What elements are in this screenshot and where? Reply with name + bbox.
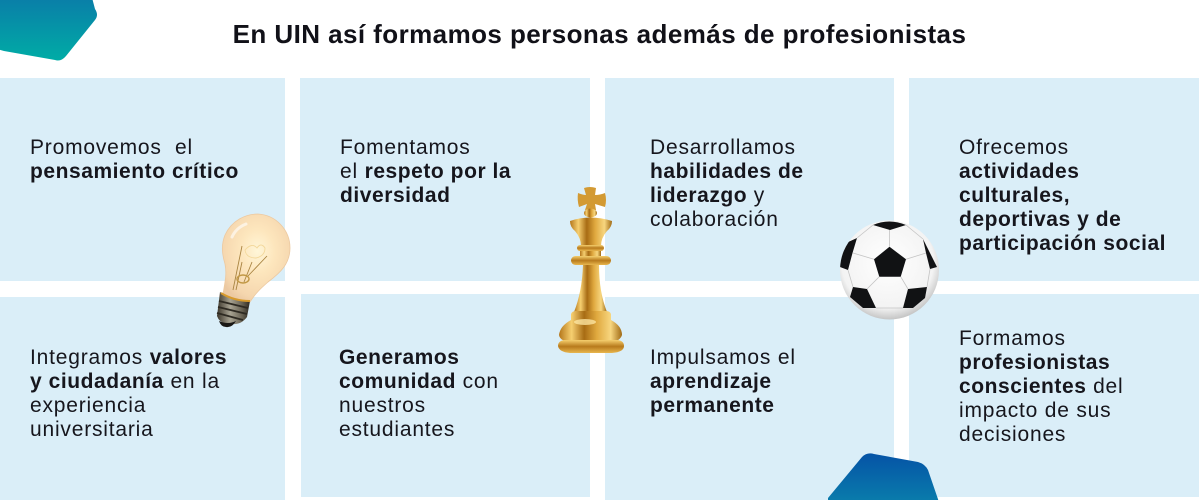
text: aprendizaje permanente: Impulsamos el bbox=[650, 346, 796, 369]
text: respeto por la diversidad: diversidad bbox=[340, 184, 451, 207]
text: pensamiento crítico bbox=[30, 136, 239, 183]
text: actividades culturales bbox=[959, 136, 1166, 255]
text: respeto por la diversidad: Fomentamos bbox=[340, 136, 471, 159]
text: aprendizaje permanente: permanente bbox=[650, 394, 775, 417]
text: valores y ciudadanía: experiencia bbox=[30, 394, 146, 417]
panel: pensamiento crítico bbox=[0, 78, 285, 281]
text: profesionistas conscientes: decisiones bbox=[959, 423, 1066, 446]
text: respeto por la diversidad: el respeto por la bbox=[340, 160, 511, 183]
panel: actividades culturales bbox=[909, 78, 1199, 281]
text: liderazgo y colaboración: liderazgo y bbox=[650, 184, 765, 207]
text: generamos comunidad: nuestros bbox=[339, 394, 426, 417]
text: pensamiento crítico: pensamiento crítico bbox=[30, 160, 239, 183]
text: profesionistas conscientes bbox=[959, 327, 1124, 446]
decorative blue hexagon, bottom right bbox=[828, 453, 938, 500]
icon: golden chess king bbox=[558, 187, 624, 353]
text: generamos comunidad: comunidad con bbox=[339, 370, 499, 393]
text: generamos comunidad: Generamos bbox=[339, 346, 460, 369]
text: aprendizaje permanente: aprendizaje bbox=[650, 370, 772, 393]
text: valores y ciudadanía: universitaria bbox=[30, 418, 154, 441]
text: valores y ciudadanía: y ciudadanía en la bbox=[30, 370, 220, 393]
panel: liderazgo y colaboración bbox=[605, 78, 894, 281]
text: actividades culturales: culturales, bbox=[959, 184, 1070, 207]
text: profesionistas conscientes: impacto de sus bbox=[959, 399, 1111, 422]
title: En UIN así formamos personas además de profesionistas bbox=[233, 19, 966, 49]
panel: aprendizaje permanente bbox=[605, 297, 894, 500]
text: profesionistas conscientes: profesionistas bbox=[959, 351, 1110, 374]
panel: generamos comunidad bbox=[301, 294, 590, 497]
text: generamos comunidad bbox=[339, 346, 499, 441]
text: liderazgo y colaboración: Desarrollamos bbox=[650, 136, 796, 159]
panel: respeto por la diversidad bbox=[300, 78, 590, 281]
text: valores y ciudadanía bbox=[30, 346, 227, 441]
text: liderazgo y colaboración: colaboración bbox=[650, 208, 779, 231]
icon: soccer ball bbox=[840, 220, 939, 320]
icon: light bulb bbox=[216, 214, 290, 328]
panel: profesionistas conscientes bbox=[909, 294, 1199, 497]
text: actividades culturales: actividades bbox=[959, 160, 1079, 183]
text: valores y ciudadanía: Integramos valores bbox=[30, 346, 227, 369]
text: actividades culturales: Ofrecemos bbox=[959, 136, 1069, 159]
text: liderazgo y colaboración: habilidades de bbox=[650, 160, 804, 183]
text: aprendizaje permanente bbox=[650, 346, 796, 417]
text: pensamiento crítico: Promovemos el bbox=[30, 136, 193, 159]
text: liderazgo y colaboración bbox=[650, 136, 804, 231]
text: generamos comunidad: estudiantes bbox=[339, 418, 455, 441]
text: actividades culturales: deportivas y de bbox=[959, 208, 1121, 231]
text: respeto por la diversidad bbox=[340, 136, 511, 207]
panel: valores y ciudadanía bbox=[0, 297, 285, 500]
text: profesionistas conscientes: conscientes del bbox=[959, 375, 1124, 398]
decorative teal hexagon, top left bbox=[0, 0, 97, 60]
text: actividades culturales: participación social bbox=[959, 232, 1166, 255]
text: profesionistas conscientes: Formamos bbox=[959, 327, 1066, 350]
